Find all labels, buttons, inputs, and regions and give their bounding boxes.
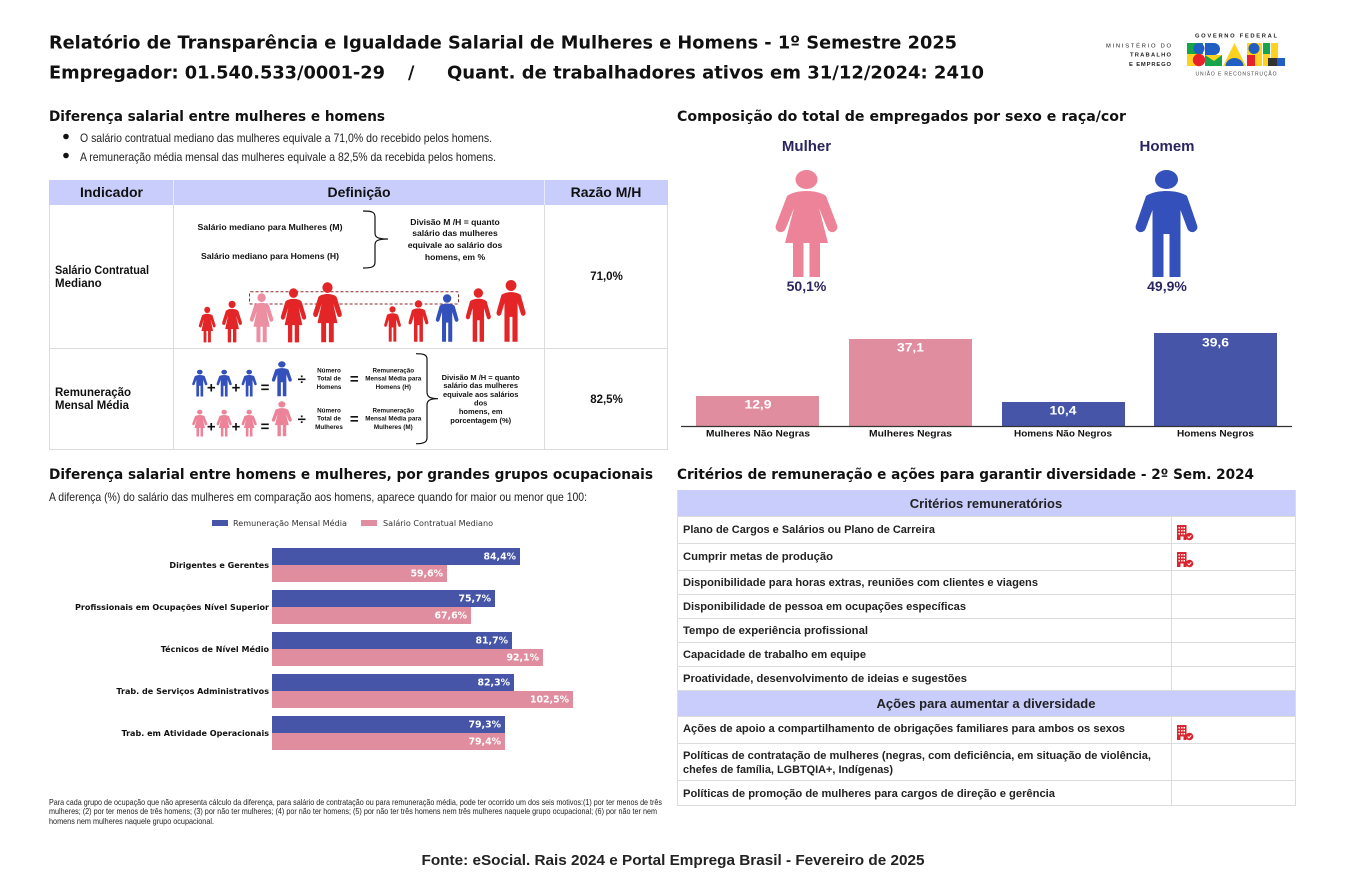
bar chart: grupos ocupacionais: Dirigentes e Gerentes bbox=[169, 561, 269, 570]
panel: tabela critérios: Critérios remuneratórios bbox=[910, 496, 1062, 511]
bar chart: grupos ocupacionais: 82,3% bbox=[477, 678, 511, 688]
bar chart: grupos ocupacionais: 79,4% bbox=[468, 736, 502, 748]
panel: tabela critérios bbox=[677, 490, 1296, 806]
legend: Remuneração Mensal Média bbox=[233, 518, 347, 528]
panel: tabela indicadores: 71,0% bbox=[590, 271, 623, 283]
panel: tabela indicadores: Mensal Média bbox=[55, 400, 130, 412]
diagrama: remuneração média: Mulheres (M) bbox=[374, 424, 413, 431]
text block: nota de rodapé: homens nem mulheres naquele grupo ocupacional. bbox=[49, 816, 214, 826]
bar chart: raça/cor: Mulheres Negras bbox=[869, 428, 952, 440]
diagrama: remuneração média: Mensal Média para bbox=[365, 376, 422, 382]
diagrama: remuneração média: Homens (H) bbox=[376, 384, 411, 391]
diagrama: remuneração média: ÷ bbox=[298, 411, 306, 428]
diagrama: remuneração média: equivale aos salários bbox=[443, 390, 518, 399]
title: Relatório de Transparência e Igualdade Salarial de Mulheres e Homens - 1º Semestre 2025 bbox=[49, 34, 957, 54]
panel: tabela critérios: chefes de família, LGBTQIA+, Indígenas) bbox=[683, 764, 893, 776]
heading: critérios: Critérios de remuneração e ações para garantir diversidade - 2º Sem. 2024 bbox=[677, 467, 1254, 483]
panel: tabela critérios: Disponibilidade para horas extras, reuniões com clientes e viagens bbox=[683, 577, 1038, 589]
panel: tabela critérios: Ações para aumentar a diversidade bbox=[877, 696, 1095, 711]
logo: Governo Federal Brasil: GOVERNO FEDERAL bbox=[1195, 34, 1277, 40]
bar chart: grupos ocupacionais: 81,7% bbox=[475, 636, 509, 646]
panel: tabela critérios: Capacidade de trabalho em equipe bbox=[683, 649, 866, 661]
bar chart: grupos ocupacionais bbox=[75, 548, 573, 750]
panel: tabela indicadores: Definição bbox=[327, 184, 391, 200]
diagrama: remuneração média: porcentagem (%) bbox=[450, 416, 512, 425]
icon: homem 49,9% bbox=[1136, 138, 1197, 294]
panel: tabela critérios: Ações de apoio a compartilhamento de obrigações familiares para ambos os sexos bbox=[683, 723, 1125, 735]
diagrama: remuneração média bbox=[192, 354, 520, 444]
text block: subtítulo do gráfico: A diferença (%) do salário das mulheres em comparação aos homens, aparece quando for maior ou menor que 100: bbox=[49, 490, 587, 504]
logo: Ministério do Trabalho e Emprego: TRABALHO bbox=[1130, 52, 1171, 58]
diagrama: remuneração média: Total de bbox=[317, 376, 341, 382]
diagrama: remuneração média: homens, em bbox=[459, 407, 503, 416]
bar chart: raça/cor: 39,6 bbox=[1202, 336, 1229, 350]
diagrama: remuneração média: Remuneração bbox=[372, 408, 414, 414]
diagrama: remuneração média: + bbox=[232, 380, 241, 396]
diagrama: salário mediano: Divisão M /H = quanto bbox=[410, 217, 500, 227]
diagrama: salário mediano: homens, em % bbox=[425, 252, 485, 262]
bar chart: raça/cor: 10,4 bbox=[1050, 404, 1077, 418]
bar chart: grupos ocupacionais: 75,7% bbox=[458, 594, 492, 604]
diagrama: salário mediano: Salário mediano para Mulheres (M) bbox=[198, 222, 343, 232]
panel: tabela indicadores: Indicador bbox=[80, 184, 144, 200]
panel: tabela indicadores: Mediano bbox=[55, 278, 102, 290]
diagrama: remuneração média: + bbox=[232, 418, 241, 436]
diagrama: remuneração média: ÷ bbox=[298, 371, 306, 388]
logo: Ministério do Trabalho e Emprego: E EMPREGO bbox=[1129, 62, 1171, 68]
logo: Governo Federal Brasil bbox=[1187, 34, 1285, 78]
bar chart: raça/cor bbox=[681, 333, 1292, 440]
diagrama: remuneração média: = bbox=[350, 371, 359, 388]
icon: homem 49,9%: 49,9% bbox=[1147, 278, 1187, 294]
diagrama: remuneração média: Mensal Média para bbox=[365, 416, 422, 422]
bar chart: raça/cor: Homens Negros bbox=[1177, 428, 1254, 440]
heading: composição: Composição do total de empregados por sexo e raça/cor bbox=[677, 109, 1126, 125]
icon: mulher 50,1%: Mulher bbox=[782, 138, 831, 155]
panel: tabela indicadores: Salário Contratual bbox=[55, 265, 149, 277]
title: Empregador: 01.540.533/0001-29 bbox=[49, 64, 385, 84]
bar chart: raça/cor: Mulheres Não Negras bbox=[706, 428, 810, 440]
icon: mulher 50,1%: 50,1% bbox=[787, 278, 827, 294]
diagrama: remuneração média: salário das mulheres bbox=[443, 381, 518, 390]
bar chart: grupos ocupacionais: 84,4% bbox=[483, 552, 517, 562]
panel: tabela indicadores bbox=[49, 180, 668, 450]
diagrama: remuneração média: Total de bbox=[317, 416, 341, 422]
logo: Ministério do Trabalho e Emprego: MINISTÉRIO DO bbox=[1106, 42, 1171, 50]
panel: tabela critérios: Disponibilidade de pessoa em ocupações específicas bbox=[683, 601, 966, 613]
panel: tabela critérios: Cumprir metas de produção bbox=[683, 551, 833, 563]
icon: mulher 50,1% bbox=[776, 138, 837, 294]
diagrama: salário mediano: equivale ao salário dos bbox=[408, 240, 503, 250]
diagrama: remuneração média: = bbox=[261, 380, 270, 396]
logo: Ministério do Trabalho e Emprego bbox=[1106, 42, 1171, 68]
diagrama: remuneração média: Mulheres bbox=[315, 424, 343, 431]
bar chart: grupos ocupacionais: Trab. em Atividade Operacionais bbox=[121, 729, 269, 738]
diagrama: remuneração média: Divisão M /H = quanto bbox=[442, 373, 520, 382]
title bbox=[49, 34, 984, 84]
text block: nota de rodapé: mulheres; (2) por ter menos de três homens; (3) por não ter mulheres; (4) por não ter homens; (5) por não ter três homens nem três mulheres naquele grupo ocupacional; (6) por não ter nem bbox=[49, 806, 657, 816]
heading: diferença salarial: Diferença salarial entre mulheres e homens bbox=[49, 109, 385, 125]
diagrama: remuneração média: + bbox=[207, 418, 216, 436]
text block: bullets: O salário contratual mediano das mulheres equivale a 71,0% do recebido pelos homens. bbox=[80, 131, 492, 145]
panel: tabela critérios: Plano de Cargos e Salários ou Plano de Carreira bbox=[683, 524, 936, 536]
bar chart: raça/cor: Homens Não Negros bbox=[1014, 428, 1112, 440]
text block: nota de rodapé bbox=[49, 797, 662, 826]
bar chart: grupos ocupacionais: Técnicos de Nível Médio bbox=[161, 644, 269, 654]
panel: tabela indicadores: 82,5% bbox=[590, 394, 623, 406]
panel: tabela critérios: Tempo de experiência profissional bbox=[683, 625, 868, 637]
diagrama: remuneração média: Número bbox=[317, 408, 341, 414]
bar chart: grupos ocupacionais: 67,6% bbox=[434, 610, 468, 622]
heading: grandes grupos ocupacionais: Diferença salarial entre homens e mulheres, por grandes grupos ocupacionais bbox=[49, 467, 653, 483]
diagrama: remuneração média: + bbox=[207, 380, 216, 396]
bar chart: raça/cor: 37,1 bbox=[897, 340, 924, 354]
diagrama: remuneração média: dos bbox=[474, 398, 487, 408]
legend bbox=[212, 518, 493, 528]
diagrama: remuneração média: = bbox=[350, 411, 359, 428]
panel: tabela critérios: Políticas de promoção de mulheres para cargos de direção e gerência bbox=[683, 788, 1056, 800]
text block: nota de rodapé: Para cada grupo de ocupação que não apresenta cálculo da diferença, para salário de contratação ou para remuneração média, pode ter ocorrido um dos seis motivos:(1) por ter menos de três bbox=[49, 797, 662, 807]
title: / bbox=[408, 64, 415, 84]
bar chart: grupos ocupacionais: 79,3% bbox=[468, 720, 502, 730]
panel: tabela critérios: Proatividade, desenvolvimento de ideias e sugestões bbox=[683, 673, 967, 685]
title: Quant. de trabalhadores ativos em 31/12/2024: 2410 bbox=[447, 64, 984, 84]
diagrama: remuneração média: = bbox=[261, 418, 270, 436]
panel: tabela indicadores: Remuneração bbox=[55, 387, 131, 399]
logo: Governo Federal Brasil: UNIÃO E RECONSTRUÇÃO bbox=[1196, 70, 1277, 78]
diagrama: salário mediano bbox=[198, 211, 526, 342]
bar chart: grupos ocupacionais: Trab. de Serviços Administrativos bbox=[116, 687, 269, 696]
text block: bullets: A remuneração média mensal das mulheres equivale a 82,5% da recebida pelos homens. bbox=[80, 150, 496, 164]
diagrama: remuneração média: Número bbox=[317, 368, 341, 374]
bar chart: grupos ocupacionais: Profissionais em Ocupações Nível Superior bbox=[75, 603, 269, 612]
fonte: Fonte: eSocial. Rais 2024 e Portal Emprega Brasil - Fevereiro de 2025 bbox=[422, 853, 924, 869]
icon: homem 49,9%: Homem bbox=[1139, 138, 1195, 155]
panel: tabela indicadores: Razão M/H bbox=[571, 184, 641, 200]
legend: Salário Contratual Mediano bbox=[383, 518, 493, 528]
bar chart: grupos ocupacionais: 92,1% bbox=[506, 652, 540, 664]
bar chart: raça/cor: 12,9 bbox=[744, 398, 772, 412]
bar chart: grupos ocupacionais: 102,5% bbox=[530, 694, 570, 706]
diagrama: remuneração média: Homens bbox=[317, 384, 342, 391]
bar chart: grupos ocupacionais: 59,6% bbox=[410, 568, 444, 580]
panel: tabela critérios: Políticas de contratação de mulheres (negras, com deficiência, em situação de violência, bbox=[683, 750, 1151, 762]
diagrama: salário mediano: salário das mulheres bbox=[412, 228, 498, 238]
diagrama: salário mediano: Salário mediano para Homens (H) bbox=[201, 251, 339, 261]
text block: bullets bbox=[63, 131, 496, 164]
diagrama: remuneração média: Remuneração bbox=[372, 368, 414, 374]
